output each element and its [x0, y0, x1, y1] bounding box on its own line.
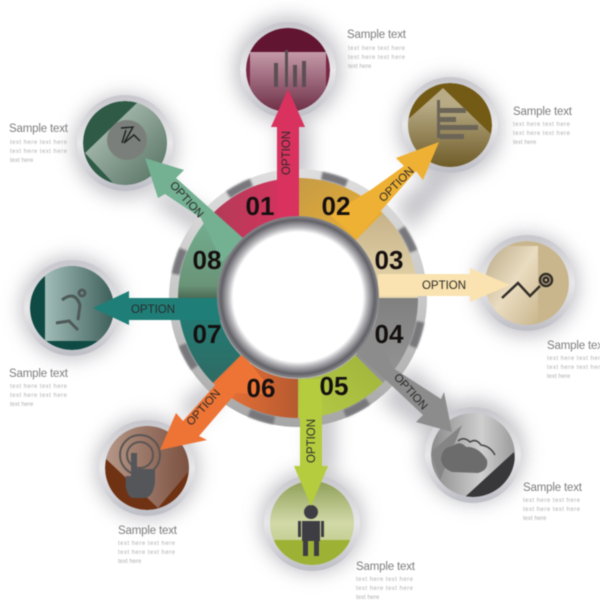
caption 06: text here [118, 559, 142, 565]
segment 04 [355, 298, 418, 383]
icon: touch [120, 435, 160, 498]
segment numbers [193, 191, 404, 403]
arrow labels: OPTION [167, 180, 205, 220]
caption 07: text here text here [10, 393, 68, 399]
segment numbers: 03 [375, 245, 403, 275]
caption 03 [547, 340, 600, 380]
caption 06: text here text here [118, 541, 176, 547]
segment 07 [178, 298, 241, 383]
segment 03 [355, 213, 418, 298]
icon: runner [56, 290, 85, 330]
caption 02 [513, 106, 573, 146]
caption 02: text here text here [513, 131, 571, 137]
caption 01: text here text here [348, 55, 406, 61]
caption 01: Sample text [347, 29, 407, 41]
caption 08: text here [10, 158, 34, 164]
icon: trend line [502, 274, 552, 298]
centre hole [217, 216, 379, 378]
segment 06 [213, 355, 298, 418]
badge 06 [105, 425, 190, 510]
arrow 03 [378, 268, 510, 302]
caption 03: text here [547, 374, 571, 380]
arrow 08 [145, 158, 243, 262]
caption 07: Sample text [9, 368, 69, 380]
caption 08 [9, 123, 69, 164]
caption 08: text here text here [10, 140, 68, 146]
badge 01 [246, 28, 330, 112]
arrow labels [131, 131, 466, 463]
badge 05 [270, 481, 354, 570]
caption 08: text here text here [10, 149, 68, 155]
caption 01: text here text here [348, 46, 406, 52]
segment 02 [298, 178, 383, 241]
caption 01 [347, 29, 407, 70]
caption 04: text here text here [523, 498, 581, 504]
caption 04: text here [523, 516, 547, 522]
arrow 01 [271, 89, 305, 217]
caption 07: text here text here [10, 384, 68, 390]
caption 01: text here [348, 64, 372, 70]
caption 06: Sample text [118, 525, 178, 537]
caption 04: Sample text [523, 482, 583, 494]
arrow labels: OPTION [281, 131, 293, 175]
arrow 07 [93, 291, 222, 325]
arrow labels: OPTION [185, 388, 223, 428]
caption 06 [118, 525, 178, 565]
arrow labels: OPTION [306, 419, 318, 463]
segment numbers: 05 [320, 371, 348, 401]
caption 02: text here text here [513, 122, 571, 128]
caption 05: text here text here [356, 586, 414, 592]
gear ring [152, 152, 444, 444]
segment numbers: 02 [322, 191, 350, 221]
caption 06: text here text here [118, 550, 176, 556]
caption 02: text here [513, 140, 537, 146]
badge 08 [83, 100, 170, 185]
caption 02: Sample text [513, 106, 573, 118]
segment 01 [213, 178, 298, 241]
icon: clouds [441, 439, 495, 473]
arrow 02 [330, 142, 439, 238]
segment 05 [298, 355, 383, 418]
segment numbers: 08 [193, 245, 221, 275]
arrow 06 [160, 354, 275, 450]
arrow labels: OPTION [131, 304, 175, 316]
caption 05 [356, 561, 416, 600]
segment 08 [178, 213, 241, 298]
caption 08: Sample text [9, 123, 69, 135]
caption 07 [9, 368, 69, 408]
arrow labels: OPTION [422, 280, 466, 292]
arrow labels: OPTION [377, 165, 417, 205]
arrow 04 [356, 326, 452, 432]
caption 04 [523, 482, 583, 522]
caption 04: text here text here [523, 507, 581, 513]
segment numbers: 01 [246, 191, 274, 221]
segment numbers: 07 [193, 319, 221, 349]
badge 04 [430, 414, 516, 498]
icon: person [298, 505, 324, 556]
icon: bar chart [274, 50, 306, 87]
segment numbers: 04 [375, 319, 404, 349]
badge 02 [405, 83, 492, 170]
arrow 05 [294, 379, 328, 506]
caption 05: Sample text [356, 561, 416, 573]
icon: broken circle [107, 120, 147, 160]
badge 07 [30, 266, 115, 350]
caption 05: text here text here [356, 577, 414, 583]
icon: horizontal bars [437, 100, 478, 139]
segment numbers: 06 [247, 373, 275, 403]
arrow labels: OPTION [391, 372, 429, 412]
badge 03 [485, 241, 569, 326]
caption 07: text here [10, 402, 34, 408]
